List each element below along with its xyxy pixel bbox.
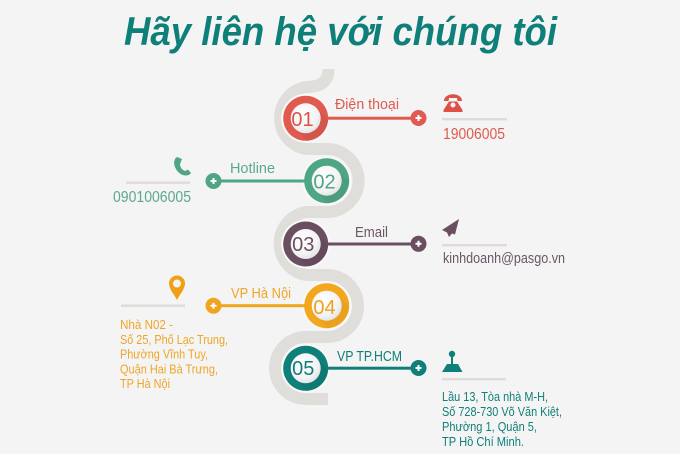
connector 03 (326, 236, 426, 252)
value 05: Lầu 13, Tòa nhà M-H, (442, 389, 548, 404)
label 04: VP Hà Nội (231, 285, 291, 302)
badge 05 (281, 344, 330, 393)
value 02 (113, 182, 191, 206)
connector 02 (206, 173, 306, 189)
title: Hãy liên hệ với chúng tôi (124, 10, 558, 54)
value 05 (442, 378, 562, 449)
icon: joystick (442, 351, 462, 372)
value 01: 19006005 (443, 126, 505, 143)
badge 05: 05 (292, 358, 314, 380)
badge 03: 03 (292, 234, 314, 256)
value 04: Số 25, Phố Lạc Trung, (120, 332, 228, 347)
value 04: Quận Hai Bà Trưng, (120, 362, 218, 376)
badge 01 (281, 94, 330, 143)
label 02: Hotline (230, 160, 275, 177)
badge 04 (302, 281, 351, 330)
value 03: kinhdoanh@pasgo.vn (443, 251, 565, 267)
badge 03 (281, 220, 330, 268)
badge 04: 04 (313, 297, 336, 319)
icon: map pin (169, 276, 185, 300)
value 04 (120, 304, 228, 391)
badge 01: 01 (291, 109, 314, 131)
value 04: TP Hà Nội (120, 376, 170, 391)
step 04: Hanoi office (120, 276, 351, 391)
value 02: 0901006005 (113, 189, 191, 206)
step 01: phone (281, 94, 507, 143)
value 05: TP Hồ Chí Minh. (442, 434, 524, 449)
value 05: Số 728-730 Võ Văn Kiệt, (442, 404, 562, 419)
value 04: Phường Vĩnh Tuy, (120, 346, 208, 362)
connector 04 (206, 298, 306, 314)
connector 05 (326, 360, 426, 376)
step 02: hotline (113, 156, 351, 206)
label 01: Điện thoại (335, 96, 399, 113)
step 05: HCMC office (281, 344, 562, 449)
badge 02 (302, 156, 351, 205)
label 03: Email (355, 224, 388, 241)
winding road (275, 69, 358, 399)
icon: handset (174, 157, 191, 176)
badge 02: 02 (313, 172, 336, 194)
value 05: Phường 1, Quận 5, (442, 419, 537, 434)
value 04: Nhà N02 - (120, 317, 173, 332)
connector 01 (326, 110, 426, 126)
value 01 (442, 118, 507, 143)
icon: paper plane (442, 219, 459, 237)
label 05: VP TP.HCM (337, 348, 402, 365)
step 03: email (281, 219, 565, 268)
value 03 (442, 244, 565, 267)
icon: telephone (444, 94, 462, 112)
